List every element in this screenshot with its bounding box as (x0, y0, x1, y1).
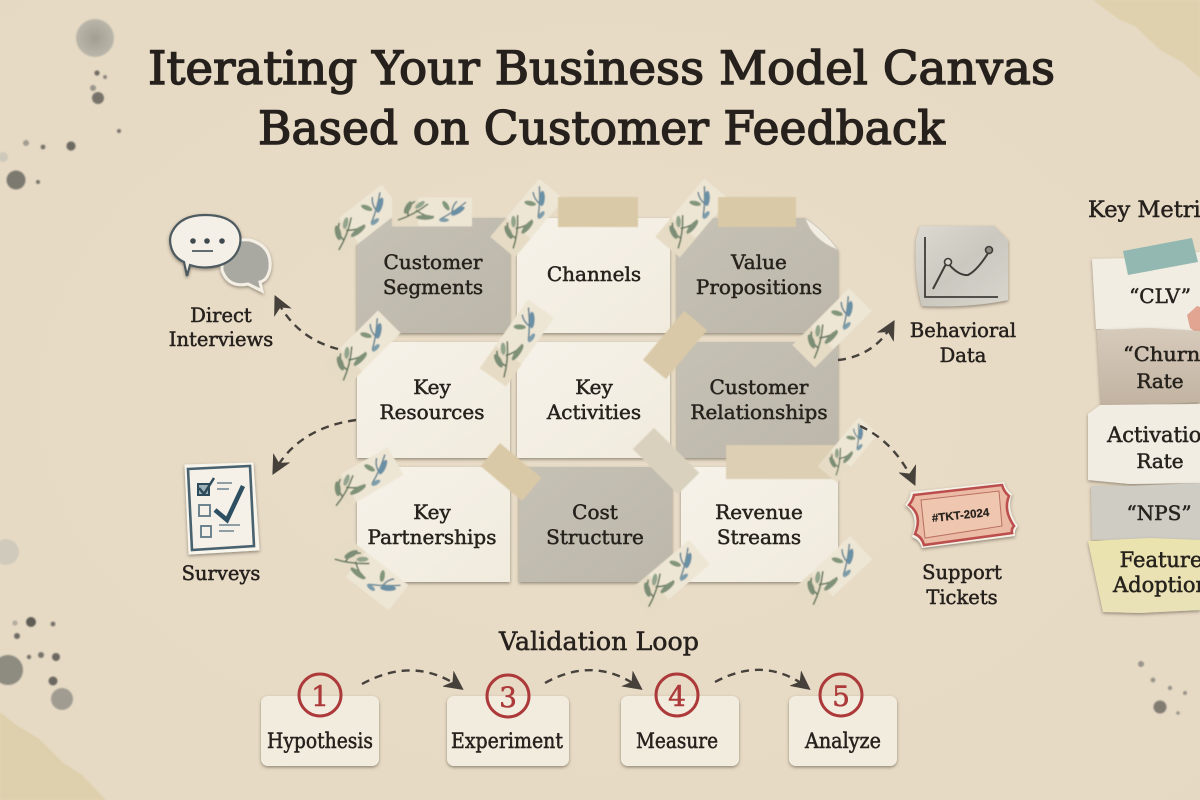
cell: Value Propositions: Propositions (696, 275, 822, 299)
cell: Customer Relationships (677, 342, 838, 458)
cell: Key Resources: Resources (380, 400, 484, 424)
cell: Customer Relationships: Relationships (690, 400, 828, 424)
step: Measure: Measure (636, 729, 718, 753)
label: Behavioral Data: Data (940, 344, 987, 367)
tape: top left of Value Propositions (655, 179, 729, 257)
tape: top of Channels (558, 197, 638, 227)
metric: CLV: “CLV” (1129, 284, 1191, 308)
arrow: experiment to measure (545, 670, 640, 688)
tape: Revenue Streams top (726, 445, 838, 479)
cell: Revenue Streams (681, 467, 838, 582)
label: Behavioral Data: Behavioral (910, 319, 1016, 342)
cell: Customer Segments: Customer (384, 250, 483, 274)
tape: top left of Customer Segments (319, 185, 401, 259)
panel: key metrics stack (1088, 238, 1200, 613)
step: Measure (621, 674, 739, 766)
corner: bottom left aged paper (0, 712, 106, 800)
tape: Value Propositions bottom right (792, 288, 872, 368)
cell: Key Activities (517, 342, 670, 458)
ink splatter: left edge (0, 539, 19, 565)
heading: Validation Loop: Validation Loop (498, 627, 699, 656)
corner: top right aged paper (1093, 0, 1200, 78)
cell: Key Partnerships: Key (413, 500, 451, 524)
icon: survey checklist (186, 464, 258, 553)
cell: Key Partnerships (357, 467, 510, 582)
cell: Key Resources: Key (413, 375, 451, 399)
arrow: to direct interviews (276, 298, 338, 349)
tape: Revenue Streams bottom right (792, 536, 872, 614)
tape: salmon (1187, 306, 1200, 335)
cell: Revenue Streams: Revenue (715, 500, 803, 524)
tape: Key Activities right (643, 311, 707, 379)
icon: behavioral data chart (916, 226, 1008, 306)
title (148, 41, 1055, 155)
metric: NPS (1091, 483, 1200, 540)
label: Direct Interviews: Interviews (169, 328, 273, 351)
tape: top of Customer Segments (392, 198, 472, 226)
washi tapes (318, 179, 878, 616)
canvas grid (357, 218, 838, 582)
metric: CLV (1092, 252, 1200, 331)
cell: Key Partnerships: Partnerships (368, 525, 496, 549)
icon: page curl (805, 218, 838, 250)
metric: NPS: “NPS” (1126, 501, 1192, 525)
tape: Key Resources top left (321, 310, 401, 390)
cell: Key Activities: Activities (546, 400, 641, 424)
icon: support ticket (905, 482, 1018, 548)
cell: Channels: Channels (547, 262, 641, 286)
tape: Key Partnerships top right (481, 443, 541, 501)
tape: teal (1123, 238, 1198, 275)
icon: speech bubbles (170, 215, 270, 291)
label: Behavioral Data (910, 319, 1016, 367)
cell: Cost Structure (519, 467, 672, 582)
cell: Customer Segments: Segments (383, 275, 483, 299)
tape: Key Partnerships top left (318, 447, 404, 515)
step: Analyze: Analyze (804, 729, 881, 753)
cell: Cost Structure: Structure (546, 525, 644, 549)
step: Hypothesis: 1 (311, 680, 329, 713)
step: Hypothesis (261, 674, 379, 766)
ink splatter: bottom right (1138, 661, 1187, 715)
label: Support Tickets: Support (922, 561, 1002, 584)
cell: Revenue Streams: Streams (717, 525, 801, 549)
step: Analyze: 5 (832, 680, 850, 713)
icon: support ticket: #TKT-2024 (931, 507, 991, 525)
step: Measure: 4 (668, 680, 686, 713)
cell: Value Propositions: Value (730, 250, 787, 274)
metric: Activation Rate (1088, 404, 1200, 484)
tape: Key Partnerships bottom left (326, 536, 408, 610)
step: Experiment: Experiment (451, 729, 564, 753)
tape: top left of Channels (490, 179, 564, 257)
arrow: to behavioral data (838, 323, 893, 360)
label: Support Tickets: Tickets (926, 586, 998, 609)
arrow: to surveys (274, 420, 356, 472)
arrow: hypothesis to experiment (362, 670, 461, 688)
process: validation loop (261, 674, 897, 766)
metric: Feature Adoption: Feature (1120, 548, 1200, 572)
arrow: to support tickets (860, 426, 914, 483)
cell: Customer Relationships: Customer (710, 375, 809, 399)
arrow: measure to analyze (715, 670, 808, 688)
tape: Cost Structure top right (633, 428, 699, 494)
tape: Key Resources top right (480, 299, 554, 387)
cell: Channels (517, 218, 670, 333)
tape: Revenue Streams top right (818, 417, 878, 483)
cell: Key Resources (357, 342, 510, 458)
label: Direct Interviews: Direct (190, 304, 252, 327)
metric: Churn Rate: Rate (1136, 369, 1184, 393)
cell: Customer Segments (357, 218, 510, 333)
step: Experiment: 3 (499, 681, 517, 714)
title: Iterating Your Business Model Canvas (148, 41, 1055, 95)
tape: top of Value Propositions (718, 197, 796, 227)
label: Surveys: Surveys (182, 562, 260, 585)
cell: Cost Structure: Cost (572, 500, 618, 524)
cell: Value Propositions (677, 218, 838, 333)
cell: Key Activities: Key (575, 375, 613, 399)
step: Experiment (447, 675, 569, 766)
tape: Cost Structure bottom right (628, 540, 710, 616)
metric: Activation Rate: Rate (1136, 449, 1184, 473)
metric: Churn Rate (1097, 328, 1200, 406)
title: Based on Customer Feedback (258, 101, 946, 155)
metric: Feature Adoption (1088, 538, 1200, 613)
label: Direct Interviews (169, 304, 273, 351)
step: Analyze (789, 674, 897, 766)
ink splatter: top left (0, 19, 121, 190)
ink splatter: bottom left (0, 617, 73, 710)
label: Support Tickets (922, 561, 1002, 609)
step: Hypothesis: Hypothesis (267, 729, 373, 753)
